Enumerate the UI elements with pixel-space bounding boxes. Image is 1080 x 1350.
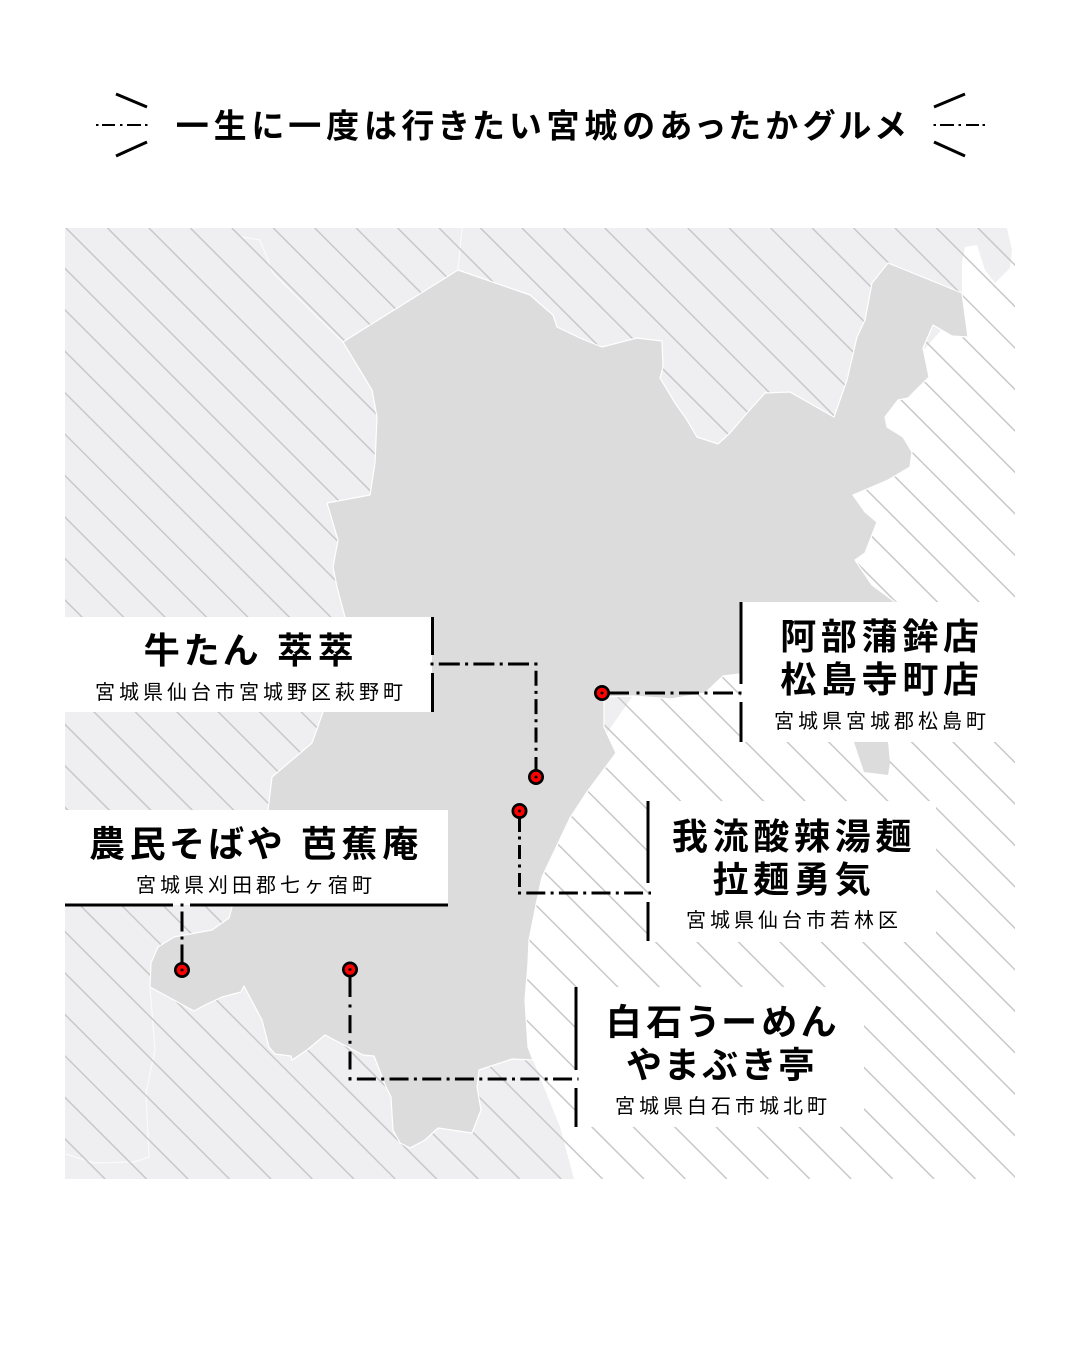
pin: 阿部蒲鉾店 bbox=[594, 685, 610, 701]
label: 白石うーめん やまぶき亭 bbox=[576, 987, 864, 1127]
label: 牛たん 萃萃 bbox=[65, 617, 432, 712]
label: 白石うーめん やまぶき亭: 白石うーめん bbox=[606, 1002, 840, 1042]
label: 白石うーめん やまぶき亭: 宮城県白石市城北町 bbox=[615, 1095, 831, 1118]
icon: right title decoration bbox=[934, 94, 985, 156]
Miyagi prefecture shape bbox=[150, 263, 968, 1148]
label: 阿部蒲鉾店 松島寺町店: 宮城県宮城郡松島町 bbox=[774, 710, 990, 733]
title: 一生に一度は行きたい宮城のあったかグルメ bbox=[176, 108, 910, 144]
label: 我流酸辣湯麺 拉麺勇気: 我流酸辣湯麺 bbox=[672, 816, 916, 857]
label: 白石うーめん やまぶき亭: やまぶき亭 bbox=[627, 1044, 819, 1086]
connector: 白石うーめん bbox=[348, 970, 578, 1080]
connector: 阿部蒲鉾店 bbox=[602, 692, 744, 694]
label: 農民そばや 芭蕉庵 bbox=[65, 810, 448, 905]
diagonal stripes bbox=[65, 228, 1015, 1179]
label: 農民そばや 芭蕉庵: 宮城県刈田郡七ヶ宿町 bbox=[136, 874, 376, 897]
pin: 農民そばや bbox=[174, 962, 190, 978]
pin: 我流酸辣湯麺 bbox=[512, 803, 528, 819]
icon: left title decoration bbox=[96, 94, 148, 156]
label: 農民そばや 芭蕉庵: 農民そばや 芭蕉庵 bbox=[89, 824, 423, 864]
label: 我流酸辣湯麺 拉麺勇気: 宮城県仙台市若林区 bbox=[686, 909, 902, 932]
prefecture borders bbox=[66, 228, 462, 1163]
island bbox=[854, 742, 890, 775]
connector: 我流酸辣湯麺 bbox=[518, 811, 651, 894]
label: 阿部蒲鉾店 松島寺町店: 松島寺町店 bbox=[780, 659, 984, 700]
label: 我流酸辣湯麺 拉麺勇気 bbox=[648, 801, 936, 942]
pin: 白石うーめん bbox=[342, 962, 358, 978]
pin: 牛たん 萃萃 bbox=[528, 769, 544, 785]
label: 牛たん 萃萃: 牛たん 萃萃 bbox=[144, 630, 358, 671]
label: 我流酸辣湯麺 拉麺勇気: 拉麺勇気 bbox=[713, 859, 875, 900]
neighbouring land background bbox=[65, 228, 1012, 1179]
connector: 牛たん 萃萃 bbox=[430, 662, 538, 777]
label: 阿部蒲鉾店 松島寺町店: 阿部蒲鉾店 bbox=[780, 616, 984, 657]
label: 牛たん 萃萃: 宮城県仙台市宮城野区萩野町 bbox=[95, 681, 407, 704]
connector: 農民そばや bbox=[180, 904, 184, 970]
label: 阿部蒲鉾店 松島寺町店 bbox=[741, 602, 1015, 742]
map bbox=[65, 228, 1015, 1179]
